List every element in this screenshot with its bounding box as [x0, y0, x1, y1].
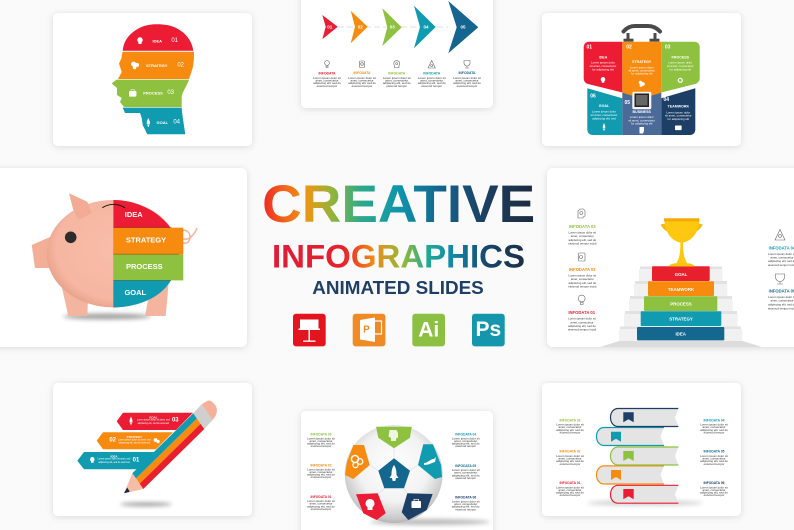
infodata 02: INFODATA	[353, 71, 371, 75]
infodata 01 left: amet, consectetur	[571, 320, 594, 324]
ribbon: idea	[77, 452, 155, 469]
pig body: IDEA	[125, 210, 143, 219]
infodata 02	[348, 61, 376, 88]
ribbon: strategy	[97, 432, 173, 449]
infodata 05: adipiscing elit, sed do	[700, 459, 728, 463]
infodata 03: INFODATA 03	[310, 432, 332, 436]
step: goal: GOAL	[675, 272, 688, 277]
subtitle: animated slides: ANIMATED SLIDES	[312, 277, 484, 298]
infodata 01: adipiscing elit, sed do	[307, 504, 335, 508]
infodata 03: Lorem ipsum dolor sit	[556, 422, 584, 426]
infodata 02: Lorem ipsum dolor sit	[556, 454, 584, 458]
head band: process: PROCESS	[143, 90, 163, 96]
section 04 teamwork	[661, 88, 695, 135]
infodata 06: eiusmod tempor	[455, 507, 476, 511]
infodata 01	[313, 61, 341, 88]
infodata 01: INFODATA 01	[559, 481, 581, 485]
step: idea: IDEA	[675, 331, 687, 336]
infodata 01: amet, consectetur	[559, 488, 582, 492]
infodata 04: amet, consectetur	[420, 79, 443, 83]
section 06 goal: Lorem ipsum dolor	[592, 110, 616, 114]
infodata 01: amet, consectetur	[310, 502, 333, 506]
arrow 01	[322, 15, 338, 39]
pig shadow	[63, 314, 151, 320]
pig ear	[69, 193, 92, 220]
pig snout	[32, 237, 50, 268]
infodata 04: INFODATA	[423, 72, 441, 76]
book red	[610, 485, 678, 503]
infodata 03	[383, 61, 411, 88]
pig body	[47, 200, 183, 307]
ball shadow	[370, 519, 490, 525]
infodata 04	[452, 432, 480, 448]
infodata 04: Lorem ipsum dolor sit	[418, 76, 446, 80]
book navy	[610, 408, 678, 426]
head band: strategy	[118, 52, 194, 79]
infodata 06: INFODATA 06	[703, 481, 725, 485]
infodata 01	[556, 481, 584, 497]
ribbon: idea: Lorem ipsum dolor sit amet, sed	[98, 458, 131, 461]
infodata 04: INFODATA 04	[703, 418, 725, 422]
section 03 process: PROCESS	[672, 56, 690, 60]
section 03 process	[661, 42, 700, 92]
step: process: PROCESS	[670, 302, 692, 306]
infodata 02: adipiscing elit, sed do	[348, 81, 376, 85]
infodata 05 right: amet, consectetur	[771, 299, 794, 303]
infodata 06	[700, 481, 728, 497]
infodata 06: amet, consectetur	[454, 502, 477, 506]
infodata 06: Lorem ipsum dolor sit	[700, 485, 728, 489]
head band: goal	[123, 108, 185, 134]
infodata 01 left	[568, 295, 596, 332]
infodata 04: eiusmod tempor	[421, 84, 442, 88]
coin slot	[102, 204, 125, 208]
infodata 02: amet, consectetur	[559, 457, 582, 461]
infodata 03 left: eiusmod tempor incidi	[568, 242, 597, 246]
panel: arrows timeline	[301, 0, 493, 108]
infodata 02	[307, 463, 335, 479]
infodata 02	[556, 450, 584, 466]
infodata 03	[307, 432, 335, 448]
infodata 01: amet, consectetur	[316, 79, 339, 83]
infodata 02 left: eiusmod tempor incidi	[568, 285, 597, 289]
infodata 05: Lorem ipsum dolor sit	[453, 76, 481, 80]
infodata 03: Lorem ipsum dolor sit	[307, 436, 335, 440]
pig eye	[65, 232, 76, 243]
stair base	[600, 341, 762, 347]
infodata 05: eiusmod tempor	[704, 462, 724, 466]
infodata 05: amet, consectetur	[456, 79, 479, 83]
icon: photoshop: Ps	[475, 318, 501, 341]
section 04 teamwork: TEAMWORK	[668, 105, 689, 109]
arrow 02	[351, 11, 368, 43]
infodata 06: INFODATA 06	[455, 495, 476, 499]
section 03 process: sit amet, consectetur	[667, 64, 694, 68]
infodata 04: Lorem ipsum dolor sit	[700, 422, 728, 426]
infodata 05 right	[768, 274, 794, 310]
infodata 04: eiusmod tempor	[455, 444, 476, 448]
ribbon: strategy: adipiscing elit, sed do eiusmod	[119, 442, 151, 444]
infodata 01: adipiscing elit, sed do	[556, 491, 584, 495]
infodata 02: eiusmod tempor	[352, 84, 372, 88]
books shadow	[587, 500, 703, 506]
ribbon: strategy: Lorem ipsum dolor sit amet, sed	[118, 438, 151, 441]
infodata 03: eiusmod tempor	[386, 84, 407, 88]
section 01 idea: for adipiscing elit	[592, 67, 614, 71]
infodata 03: amet, consectetur	[385, 79, 408, 83]
step: idea	[637, 327, 724, 340]
infodata 02: amet, consectetur	[351, 79, 374, 83]
infodata 01 left: Lorem ipsum dolor sit	[568, 317, 596, 321]
pentagon green	[376, 427, 412, 448]
infodata 03 left: Lorem ipsum dolor sit	[568, 230, 596, 234]
infodata 03: Lorem ipsum dolor sit	[383, 76, 411, 80]
infodata 03: adipiscing elit, sed do	[307, 442, 335, 446]
infodata 05: adipiscing elit, sed do	[452, 473, 480, 477]
infodata 01: eiusmod tempor	[560, 493, 580, 497]
infodata 03	[556, 418, 584, 434]
section 06 goal: GOAL	[599, 104, 610, 108]
infodata 02: adipiscing elit, sed do	[556, 459, 584, 463]
section 06 goal: adipiscing elit, sed	[592, 116, 616, 120]
infodata 02 left: amet, consectetur	[571, 277, 594, 281]
infodata 04	[700, 418, 728, 434]
section 05 business: 05	[625, 100, 630, 106]
arrow 03: 03	[390, 24, 395, 30]
section 02 strategy: for adipiscing elit	[631, 72, 653, 76]
infodata 05: INFODATA 05	[455, 464, 476, 468]
icon: illustrator: Ai	[418, 318, 439, 342]
infodata 05: INFODATA	[458, 71, 476, 75]
pig body: PROCESS	[126, 262, 163, 271]
section 03 process: 03	[665, 44, 671, 50]
section 06 goal: 06	[590, 93, 596, 99]
pentagon red	[356, 493, 386, 520]
infodata 01	[307, 495, 335, 511]
head band: idea: 01	[171, 38, 179, 44]
infodata 04: adipiscing elit, sed do	[418, 81, 446, 85]
infodata 03: INFODATA 03	[559, 418, 581, 422]
arrow 05: 05	[460, 24, 466, 30]
infodata 05: Lorem ipsum dolor sit	[452, 468, 480, 472]
step: teamwork: TEAMWORK	[668, 287, 695, 292]
ribbon: idea: 01	[133, 457, 140, 463]
step: strategy	[641, 311, 721, 326]
infodata 04: adipiscing elit, sed do	[452, 442, 480, 446]
section 01 idea	[584, 42, 622, 92]
section 05 business: BUSINESS	[633, 110, 651, 114]
infodata 02 left: INFODATA 02	[569, 267, 596, 272]
section 04 teamwork: 04	[664, 97, 669, 103]
panel: soccer ball	[301, 411, 493, 530]
briefcase clasp	[632, 92, 651, 109]
infodata 03: eiusmod tempor	[311, 444, 331, 448]
head band: strategy: STRATEGY	[146, 63, 168, 68]
panel: head	[53, 13, 252, 146]
icon: keynote	[293, 314, 326, 346]
infodata 03 left: adipiscing elit, sed do	[568, 238, 597, 242]
infodata 01: INFODATA	[318, 72, 336, 76]
arrow 04: 04	[423, 24, 429, 30]
icon: powerpoint: P	[363, 324, 370, 336]
infodata 05	[452, 464, 480, 480]
step: strategy: STRATEGY	[669, 316, 693, 322]
infodata 04 right	[768, 230, 794, 267]
infodata 06: Lorem ipsum dolor sit	[452, 499, 480, 503]
dotted connector	[338, 26, 448, 28]
section 02 strategy: Lorem ipsum dolor	[630, 65, 654, 69]
pentagon teal	[418, 444, 442, 479]
infodata 04	[418, 60, 446, 88]
infodata 02 left: adipiscing elit, sed do	[568, 281, 597, 285]
title: creative: CREATIVE	[262, 175, 535, 234]
section 01 idea: sit amet, consectetur	[590, 64, 616, 68]
section 02 strategy	[622, 42, 661, 98]
panel: piggy bank	[0, 168, 247, 347]
ball sphere	[345, 425, 443, 523]
infodata 06: eiusmod tempor	[704, 493, 724, 497]
book orange	[596, 466, 664, 484]
stair side steps	[619, 266, 742, 341]
infodata 05	[700, 450, 728, 466]
arrow 01: 01	[327, 24, 333, 30]
infodata 01: eiusmod tempor	[311, 507, 331, 511]
section 02 strategy: 02	[626, 44, 632, 50]
icon: illustrator	[412, 314, 445, 346]
infodata 04: Lorem ipsum dolor sit	[452, 436, 480, 440]
infodata 03 left: amet, consectetur	[571, 234, 594, 238]
infodata 04: adipiscing elit, sed do	[700, 428, 728, 432]
infodata 02: eiusmod tempor	[560, 462, 580, 466]
head band: process: 03	[167, 90, 175, 96]
step: teamwork	[648, 281, 714, 296]
infodata 02: INFODATA 02	[310, 463, 332, 467]
arrow 03	[382, 8, 402, 46]
section 04 teamwork: for adipiscing elit	[668, 117, 689, 121]
section 04 teamwork: Lorem ipsum dolor	[666, 110, 690, 114]
infodata 06: amet, consectetur	[703, 488, 726, 492]
panel: pencil	[53, 383, 252, 516]
pig coloured segments	[113, 200, 183, 307]
infodata 04: eiusmod tempor	[704, 430, 724, 434]
section 06 goal	[587, 88, 622, 135]
head band: process	[112, 80, 189, 107]
arrow 05	[448, 1, 478, 53]
infodata 02 left: Lorem ipsum dolor sit	[568, 273, 596, 277]
section 01 idea: Lorem ipsum dolor	[591, 61, 615, 65]
section 03 process: Lorem ipsum dolor	[668, 61, 692, 65]
ribbon: goal: GOAL	[149, 415, 158, 419]
ribbon: idea: adipiscing elit, sed do eiusmod	[98, 461, 130, 464]
infodata 03: amet, consectetur	[310, 439, 333, 443]
icon: powerpoint	[353, 314, 385, 346]
infodata 01 left: adipiscing elit, sed do	[568, 324, 596, 328]
infodata 05: adipiscing elit, sed do	[453, 81, 481, 85]
step: process	[644, 296, 717, 311]
infodata 01: INFODATA 01	[310, 495, 332, 499]
infodata 05: eiusmod tempor	[457, 84, 477, 88]
arrow 04	[414, 6, 436, 48]
infodata 06: adipiscing elit, sed do	[700, 491, 728, 495]
arrow 02: 02	[358, 24, 363, 30]
panel: staircase	[547, 168, 794, 347]
head band: goal: GOAL	[157, 120, 169, 125]
infodata 01: adipiscing elit, sed do	[313, 81, 341, 85]
infodata 03 left	[568, 209, 597, 246]
pentagon navy	[402, 493, 433, 520]
infodata 02: eiusmod tempor	[311, 475, 331, 479]
ribbon: goal: adipiscing elit, sed do eiusmod	[138, 422, 170, 425]
head band: goal: 04	[173, 119, 181, 125]
infodata 02 left	[568, 253, 597, 289]
infodata 01 left: INFODATA 01	[568, 310, 596, 315]
ribbon: goal: 03	[172, 418, 179, 424]
infodata 05: INFODATA 05	[703, 450, 725, 454]
infodata 01: Lorem ipsum dolor sit	[307, 499, 335, 503]
infodata 04: amet, consectetur	[454, 439, 477, 443]
section 05 business	[622, 92, 661, 135]
infodata 05: amet, consectetur	[454, 471, 477, 475]
infodata 01: eiusmod tempor	[317, 84, 337, 88]
infodata 01: Lorem ipsum dolor sit	[313, 76, 341, 80]
ribbon: goal	[117, 413, 193, 430]
pencil shadow	[120, 503, 172, 506]
infodata 05: amet, consectetur	[703, 457, 726, 461]
head band: idea: IDEA	[153, 38, 162, 44]
section 01 idea: 01	[587, 44, 592, 50]
panel: books	[542, 383, 741, 516]
infodata 04: INFODATA 04	[455, 432, 476, 436]
panel: briefcase	[542, 13, 741, 146]
briefcase handle	[624, 26, 660, 42]
pig body: STRATEGY	[126, 236, 166, 244]
infodata 05: Lorem ipsum dolor sit	[700, 454, 728, 458]
ribbon: strategy: STRATEGY	[127, 435, 142, 439]
infodata 03: adipiscing elit, sed do	[556, 428, 584, 432]
book green	[610, 447, 678, 465]
pentagon orange	[345, 445, 370, 479]
infodata 06: adipiscing elit, sed do	[452, 505, 480, 509]
infodata 02: amet, consectetur	[310, 470, 333, 474]
step: goal	[652, 266, 710, 281]
infodata 02: Lorem ipsum dolor sit	[348, 76, 376, 80]
ribbon: idea: IDEA	[111, 455, 118, 459]
infodata 01 left: eiusmod tempor incidi	[568, 328, 596, 332]
infodata 04: amet, consectetur	[703, 425, 726, 429]
pentagon center	[378, 458, 410, 488]
infodata 02: adipiscing elit, sed do	[307, 473, 335, 477]
infodata 03 left: INFODATA 03	[569, 224, 596, 229]
section 01 idea: IDEA	[599, 56, 608, 60]
section 03 process: for adipiscing elit	[670, 67, 691, 71]
section 06 goal: sit amet, consectetur	[591, 113, 617, 117]
ribbon: goal: Lorem ipsum dolor sit amet, sed	[137, 419, 170, 422]
section 05 business: Lorem ipsum dolor	[630, 115, 654, 119]
title: infographics: INFOGRAPHICS	[272, 239, 525, 275]
trophy	[661, 218, 703, 266]
ribbon: strategy: 02	[109, 438, 117, 444]
pig tail	[177, 228, 197, 243]
pig body: GOAL	[124, 288, 147, 297]
pig legs	[62, 285, 168, 316]
infodata 02: INFODATA 02	[559, 450, 581, 454]
infodata 05	[453, 60, 481, 88]
infodata 02: Lorem ipsum dolor sit	[307, 467, 335, 471]
book teal	[596, 428, 664, 446]
head band: idea	[123, 24, 193, 51]
infodata 03: amet, consectetur	[559, 425, 582, 429]
infodata 04 right: amet, consectetur	[771, 256, 794, 260]
section 04 teamwork: sit amet, consectetur	[665, 114, 692, 118]
section 02 strategy: sit amet, consectetur	[628, 68, 655, 72]
pencil	[124, 400, 217, 493]
section 05 business: sit amet, consectetur	[628, 118, 655, 122]
infodata 03: INFODATA	[388, 72, 406, 76]
head band: strategy: 02	[177, 63, 185, 69]
infodata 01: Lorem ipsum dolor sit	[556, 485, 584, 489]
icon: photoshop	[472, 314, 505, 346]
infodata 06	[452, 495, 480, 511]
infodata 03: adipiscing elit, sed do	[383, 81, 411, 85]
infodata 05: eiusmod tempor	[455, 476, 476, 480]
section 02 strategy: STRATEGY	[632, 60, 652, 64]
section 05 business: for adipiscing elit	[631, 121, 653, 125]
infodata 03: eiusmod tempor	[560, 430, 580, 434]
